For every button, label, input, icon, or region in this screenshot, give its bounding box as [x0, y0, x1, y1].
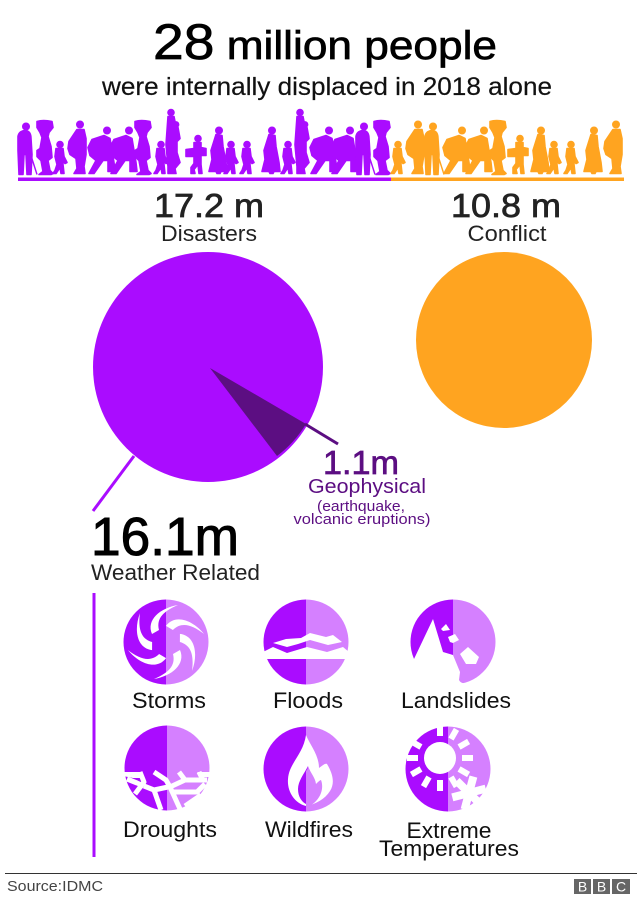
icon: extreme temperatures: [406, 725, 490, 813]
extreme temperatures label: [379, 818, 519, 861]
people silhouettes: disasters: [18, 110, 390, 174]
bar: disasters share: [18, 178, 391, 181]
leader line: weather related: [93, 456, 134, 511]
disasters value: 17.2 m: [154, 187, 264, 224]
icon: storms: [124, 600, 208, 684]
geophysical callout: (earthquake,: [317, 498, 405, 515]
icon: floods: [263, 600, 349, 684]
circle: conflict: [416, 252, 592, 428]
wildfires label: Wildfires: [265, 817, 353, 842]
conflict value: 10.8 m: [451, 187, 561, 224]
landslides label: Landslides: [401, 688, 511, 713]
weather related value: 16.1m: [91, 507, 239, 567]
bracket line: [92, 593, 96, 857]
storms label: Storms: [132, 688, 206, 713]
pie chart: disasters: [93, 252, 323, 482]
people silhouettes: conflict: [391, 120, 622, 174]
conflict label: Conflict: [468, 221, 547, 246]
geophysical callout: [294, 444, 431, 528]
geophysical callout: 1.1m: [323, 444, 399, 481]
BBC logo: [574, 878, 630, 894]
bar: conflict share: [391, 178, 624, 181]
source: Source:IDMC: [7, 878, 103, 895]
BBC logo: B: [578, 878, 587, 894]
icon: wildfires: [264, 726, 348, 812]
geophysical callout: Geophysical: [308, 476, 426, 498]
subtitle: were internally displaced in 2018 alone: [101, 73, 552, 101]
floods label: Floods: [273, 688, 343, 713]
leader line: geophysical: [305, 424, 338, 444]
BBC logo: B: [597, 878, 606, 894]
droughts label: Droughts: [123, 817, 217, 842]
extreme temperatures label: Extreme: [406, 818, 492, 843]
title: 28 million people: [153, 14, 497, 70]
weather related label: Weather Related: [91, 560, 260, 585]
icon: landslides: [403, 600, 496, 692]
extreme temperatures label: Temperatures: [379, 836, 519, 861]
disasters label: Disasters: [161, 221, 257, 246]
BBC logo: C: [616, 878, 626, 894]
icon: droughts: [123, 726, 211, 810]
geophysical callout: volcanic eruptions): [294, 511, 431, 528]
footer rule: [5, 872, 637, 874]
